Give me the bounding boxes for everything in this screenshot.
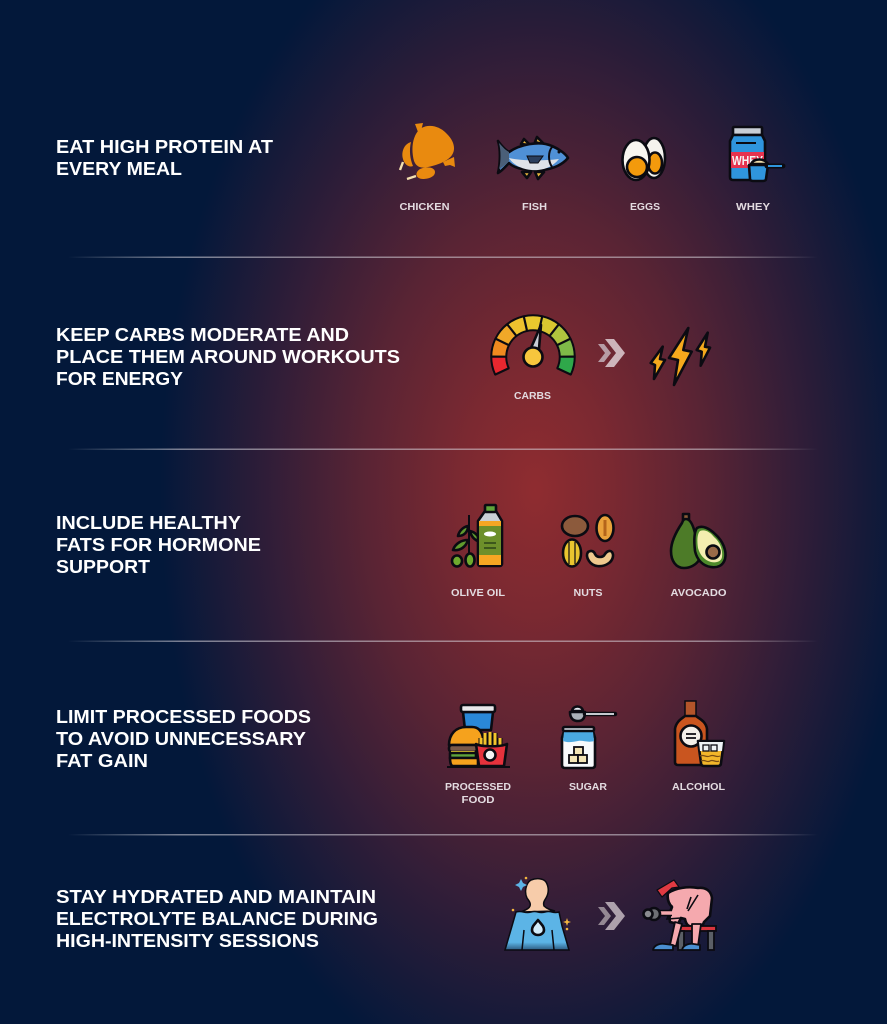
label: whey: WHEY bbox=[736, 201, 770, 213]
label: avocado: AVOCADO bbox=[670, 587, 726, 599]
icon: muscular man lifting dumbbell bbox=[644, 880, 716, 950]
icon: chicken bbox=[400, 123, 455, 179]
label: chicken: CHICKEN bbox=[400, 201, 450, 213]
icon: carbs gauge bbox=[492, 316, 574, 374]
label: processed food: FOOD bbox=[462, 794, 495, 806]
section 1: protein bbox=[56, 123, 783, 213]
section 5: hydration bbox=[56, 877, 716, 951]
section 4: processed bbox=[56, 701, 726, 806]
heading: healthy fats: SUPPORT bbox=[56, 556, 151, 577]
icon: alcohol bbox=[675, 701, 724, 766]
heading: limit processed foods: FAT GAIN bbox=[56, 750, 148, 771]
label: olive oil: OLIVE OIL bbox=[451, 587, 506, 599]
heading: keep carbs moderate: FOR ENERGY bbox=[56, 368, 184, 389]
heading: stay hydrated: ELECTROLYTE BALANCE DURING bbox=[56, 908, 378, 929]
section 2: carbs bbox=[56, 316, 710, 402]
heading: healthy fats: INCLUDE HEALTHY bbox=[56, 512, 242, 533]
heading: eat high protein: EAT HIGH PROTEIN AT bbox=[56, 136, 274, 157]
icon: hydrated person bbox=[505, 877, 571, 950]
heading: eat high protein: EVERY MEAL bbox=[56, 158, 182, 179]
icon: avocado bbox=[671, 514, 726, 568]
label: alcohol: ALCOHOL bbox=[672, 781, 726, 793]
label: processed food bbox=[445, 781, 511, 806]
label: sugar: SUGAR bbox=[569, 781, 607, 793]
heading: healthy fats: FATS FOR HORMONE bbox=[56, 534, 261, 555]
heading: healthy fats bbox=[56, 512, 261, 577]
heading: stay hydrated: STAY HYDRATED AND MAINTAIN bbox=[56, 886, 376, 907]
label: processed food: PROCESSED bbox=[445, 781, 511, 793]
label: nuts: NUTS bbox=[574, 587, 602, 599]
icon: lightning bolts bbox=[651, 328, 710, 385]
icon: eggs bbox=[622, 138, 665, 180]
heading: stay hydrated: HIGH-INTENSITY SESSIONS bbox=[56, 930, 319, 951]
heading: eat high protein bbox=[56, 136, 274, 179]
heading: limit processed foods: LIMIT PROCESSED FOODS bbox=[56, 706, 311, 727]
icon: sugar bbox=[562, 706, 615, 768]
heading: keep carbs moderate: KEEP CARBS MODERATE AND bbox=[56, 324, 349, 345]
icon: olive oil bbox=[452, 505, 502, 566]
heading: keep carbs moderate bbox=[56, 324, 400, 389]
heading: limit processed foods: TO AVOID UNNECESSARY bbox=[56, 728, 307, 749]
heading: keep carbs moderate: PLACE THEM AROUND WORKOUTS bbox=[56, 346, 400, 367]
heading: stay hydrated bbox=[56, 886, 378, 951]
heading: limit processed foods bbox=[56, 706, 311, 771]
arrow: carbs to energy bbox=[598, 339, 625, 367]
arrow: hydration to performance bbox=[598, 902, 625, 930]
icon: fish bbox=[498, 137, 568, 179]
label: eggs: EGGS bbox=[630, 201, 660, 213]
section 3: fats bbox=[56, 505, 726, 599]
icon: whey bbox=[730, 127, 783, 181]
icon: nuts bbox=[562, 515, 614, 566]
label: fish: FISH bbox=[522, 201, 547, 213]
label: carbs: CARBS bbox=[514, 390, 551, 402]
icon: whey: WHEY bbox=[732, 154, 764, 168]
icon: processed food bbox=[447, 705, 510, 767]
